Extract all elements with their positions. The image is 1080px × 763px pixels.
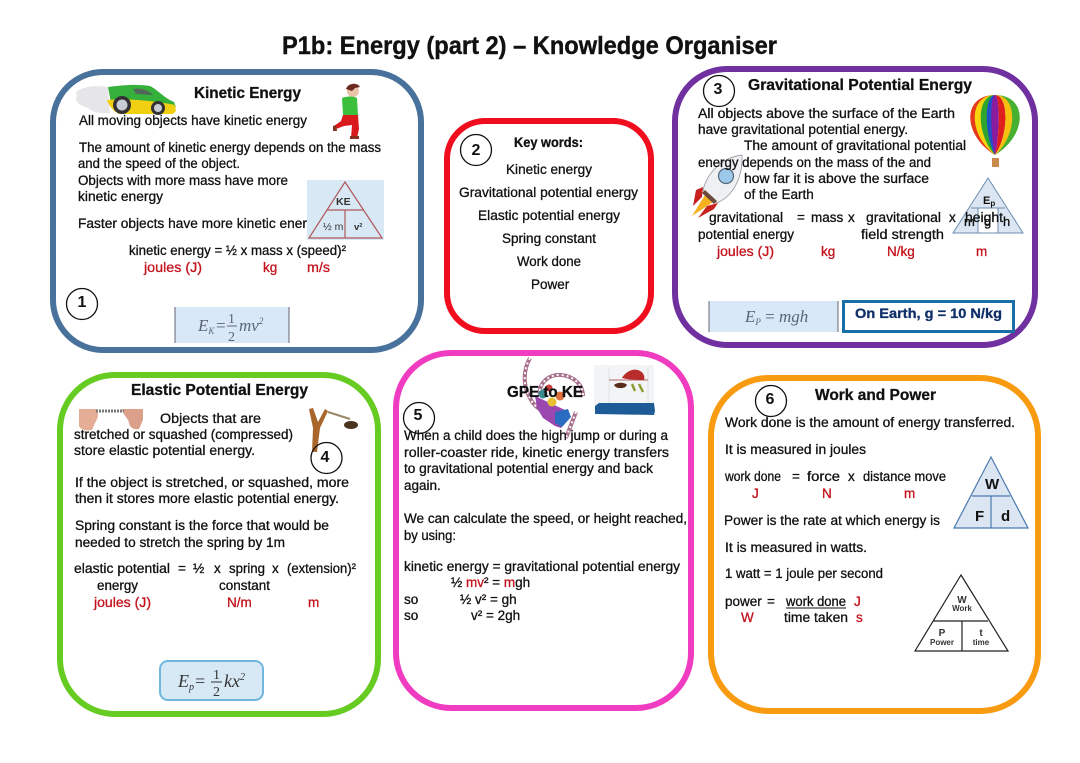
text block: description: energy depends on the mass of the and <box>698 155 931 170</box>
text block: work: force <box>807 469 840 484</box>
formula triangle: power: P <box>939 628 946 639</box>
units: N/kg <box>887 244 915 259</box>
icon: catapult <box>309 408 358 452</box>
text block: description: then it stores more elastic potential energy. <box>75 491 339 506</box>
equations: speed and height: ½ v² = gh <box>460 592 517 607</box>
heading: Elastic Potential Energy <box>131 382 308 399</box>
text block: intro: All moving objects have kinetic energy <box>79 113 307 128</box>
equation: elastic potential energy: ½ <box>193 561 204 576</box>
text block: power: It is measured in watts. <box>725 540 867 555</box>
units: joules (J) <box>93 595 151 610</box>
icon: roller coaster <box>525 358 583 438</box>
text block: description: When a child does the high jump or during a <box>404 428 668 443</box>
callout: g value <box>844 302 1014 332</box>
text block: description: We can calculate the speed, or height reached, <box>404 511 687 526</box>
equations: speed and height: so <box>404 592 418 607</box>
number 2: 2 <box>472 142 481 159</box>
number 6: 6 <box>766 391 775 408</box>
formula box: Ee <box>160 661 263 700</box>
text block: description: by using: <box>404 528 456 543</box>
equation: GPE: field strength <box>861 227 944 242</box>
units <box>716 244 987 259</box>
formula triangle: power: t <box>979 628 983 639</box>
units: work: N <box>822 486 832 501</box>
equations: speed and height: v² = 2gh <box>471 608 520 623</box>
formula triangle: power: W <box>957 595 967 606</box>
heading: Gravitational Potential Energy <box>748 77 972 94</box>
formula box: Ek: K <box>207 326 215 336</box>
text block: description: All objects above the surface of the Earth <box>698 106 955 121</box>
equation: power: work done <box>785 594 846 609</box>
equation: power: s <box>856 610 863 625</box>
panel: elastic potential energy <box>60 375 378 714</box>
text block: description: needed to stretch the spring by 1m <box>75 535 285 550</box>
formula triangle: KE <box>307 180 384 240</box>
equation: power <box>725 594 863 625</box>
formula box: Ee: 2 <box>240 672 245 683</box>
equation: elastic potential energy: x <box>214 561 221 576</box>
units: kg <box>263 260 277 275</box>
number 5: 5 <box>414 407 423 424</box>
units: N/m <box>227 595 252 610</box>
panel: key words <box>447 121 651 331</box>
key word list <box>459 162 638 292</box>
formula box: Ep: P <box>754 317 761 327</box>
units: joules (J) <box>716 244 774 259</box>
text block: work: x <box>848 469 855 484</box>
formula triangle: work: W <box>985 476 1000 493</box>
formula box: Ek: 2 <box>228 330 235 345</box>
equation: GPE: x <box>848 210 855 225</box>
formula box: Ek: = <box>216 316 226 335</box>
formula triangle: Ep: E <box>983 195 990 207</box>
icon: high jump <box>594 365 655 415</box>
equation: GPE: potential energy <box>698 227 794 242</box>
number 5 <box>404 402 434 434</box>
text block: power <box>724 513 940 581</box>
text block: description: Spring constant is the force that would be <box>75 518 329 533</box>
text block: description: The amount of gravitational potential <box>744 138 966 153</box>
units: work <box>752 486 915 501</box>
formula box: Ee: = <box>195 671 205 691</box>
units: work: m <box>904 486 915 501</box>
equation: elastic potential energy <box>74 561 356 593</box>
equation: power: = <box>767 594 775 609</box>
icon: hot air balloon <box>970 95 1020 167</box>
text block: description: Objects that are <box>160 411 261 426</box>
equation: elastic potential energy: spring <box>229 561 265 576</box>
formula triangle: Ep: h <box>1003 214 1010 229</box>
heading: GPE to KE <box>507 384 583 401</box>
number 3: 3 <box>714 81 723 98</box>
equation: elastic potential energy: constant <box>219 578 270 593</box>
formula box: Ep <box>709 301 838 332</box>
equation: elastic potential energy: energy <box>97 578 138 593</box>
text block: work: work done <box>724 469 781 484</box>
formula box: Ek: E <box>198 316 208 335</box>
key word list: Elastic potential energy <box>478 208 620 223</box>
number 4 <box>311 442 342 474</box>
number 1: 1 <box>78 294 87 311</box>
text block: work <box>724 415 1015 484</box>
equation: GPE: gravitational <box>866 210 941 225</box>
callout: g value: On Earth, g = 10 N/kg <box>855 306 1002 321</box>
formula triangle: KE: KE <box>336 196 351 208</box>
formula triangle: power: Power <box>930 638 954 647</box>
text block: intro: Faster objects have more kinetic ener <box>78 216 308 231</box>
panel: work and power <box>711 378 1038 711</box>
formula box: Ee: 2 <box>213 685 220 700</box>
text block: work: It is measured in joules <box>725 442 866 457</box>
equations: speed and height: ½ mv² = mgh <box>451 575 530 590</box>
equation: power: W <box>741 610 754 625</box>
number 2 <box>460 134 492 166</box>
equation: elastic potential energy: elastic potential <box>74 561 170 576</box>
units: joules (J) <box>143 260 202 275</box>
text block: description: store elastic potential energy. <box>74 443 255 458</box>
icon: running boy <box>333 84 360 139</box>
formula box: Ee: kx <box>224 671 240 691</box>
heading: Kinetic Energy <box>194 85 301 102</box>
icon: rocket <box>692 155 742 218</box>
formula triangle: work <box>954 457 1028 528</box>
text block: description: roller-coaster ride, kinetic energy transfers <box>404 445 669 460</box>
text block: power: Power is the rate at which energy is <box>724 513 940 528</box>
units <box>143 260 330 275</box>
key word list: Spring constant <box>502 231 596 246</box>
text block: intro <box>78 113 381 231</box>
equation: elastic potential energy: x <box>272 561 279 576</box>
equation: GPE: gravitational <box>709 210 783 225</box>
text block: description: If the object is stretched, or squashed, more <box>75 475 349 490</box>
text block: description <box>74 411 349 550</box>
key word list: Kinetic energy <box>506 162 592 177</box>
units: m <box>308 595 319 610</box>
panel: GPE to KE <box>396 353 691 708</box>
key word list: Gravitational potential energy <box>459 185 638 200</box>
formula box: Ee: E <box>178 671 189 691</box>
formula box: Ep: mgh <box>779 307 808 326</box>
text block: work: = <box>792 469 800 484</box>
text block: description: of the Earth <box>744 187 814 202</box>
equation: kinetic energy: kinetic energy = ½ x mass x (speed)² <box>129 243 346 258</box>
text block: description <box>404 428 687 543</box>
text block: description: stretched or squashed (compressed) <box>74 427 293 442</box>
key word list: Power <box>531 277 570 292</box>
formula triangle: KE: v² <box>354 222 362 233</box>
equation: power: time taken <box>784 610 848 625</box>
equation: power: J <box>854 594 861 609</box>
equations: speed and height <box>404 559 680 623</box>
formula triangle: KE: ½ m <box>323 221 344 233</box>
formula triangle: Ep: g <box>984 214 991 229</box>
equation: elastic potential energy: = <box>178 561 186 576</box>
number 1 <box>66 288 98 320</box>
units: m <box>976 244 987 259</box>
formula triangle: Ep: p <box>990 199 995 208</box>
units: work: J <box>752 486 759 501</box>
units: kg <box>821 244 835 259</box>
equation: GPE: height <box>965 210 1003 225</box>
number 3 <box>704 76 734 106</box>
text block: description: have gravitational potential energy. <box>698 122 908 137</box>
text block: work: Work done is the amount of energy transferred. <box>725 415 1015 430</box>
formula triangle: work: F <box>975 508 984 525</box>
formula triangle: Ep <box>953 178 1023 233</box>
heading: Work and Power <box>815 387 936 404</box>
number 4: 4 <box>321 449 330 466</box>
formula box: Ee: p <box>188 682 194 693</box>
panel: kinetic energy <box>53 72 421 350</box>
text block: power: 1 watt = 1 joule per second <box>725 566 883 581</box>
formula box: Ep: = <box>761 307 779 326</box>
equations: speed and height: kinetic energy = gravitational potential energy <box>404 559 680 574</box>
title: P1b: Energy (part 2) – Knowledge Organiser <box>282 32 777 60</box>
formula triangle: Ep: m <box>964 214 975 229</box>
text block: description <box>698 106 966 202</box>
equation: GPE: mass <box>811 210 844 225</box>
icon: stretched spring <box>79 409 143 430</box>
text block: intro: The amount of kinetic energy depends on the mass <box>79 140 381 155</box>
formula box: Ek: 1 <box>228 312 235 327</box>
panel: gravitational potential energy <box>675 69 1035 345</box>
icon: speeding car <box>76 85 176 115</box>
equation: power: power <box>725 594 762 609</box>
formula triangle: power: Work <box>952 604 972 613</box>
text block: intro: Objects with more mass have more <box>78 173 288 188</box>
equation: elastic potential energy: (extension)² <box>287 561 356 576</box>
text block: description: again. <box>404 478 441 493</box>
equations: speed and height: so <box>404 608 418 623</box>
number 6 <box>756 386 786 416</box>
text block: description: to gravitational potential energy and back <box>404 461 653 476</box>
text block: description: how far it is above the surface <box>744 171 929 186</box>
equation: GPE <box>698 210 1003 242</box>
formula box: Ek: mv <box>239 316 259 335</box>
formula triangle: work: d <box>1001 508 1010 525</box>
key word list: Work done <box>517 254 581 269</box>
text block: intro: kinetic energy <box>78 189 163 204</box>
text block: intro: and the speed of the object. <box>78 156 240 171</box>
heading: Key words: <box>514 135 583 150</box>
formula box: Ep: E <box>745 307 755 326</box>
formula triangle: power: time <box>973 638 990 647</box>
units: m/s <box>307 260 330 275</box>
formula box: Ek: 2 <box>259 316 264 326</box>
text block: work: distance move <box>863 469 946 484</box>
units <box>93 595 319 610</box>
formula triangle: power <box>915 575 1008 651</box>
equation: GPE: x <box>949 210 956 225</box>
formula box: Ek <box>175 307 289 345</box>
equation: GPE: = <box>797 210 805 225</box>
formula box: Ee: 1 <box>213 668 220 683</box>
